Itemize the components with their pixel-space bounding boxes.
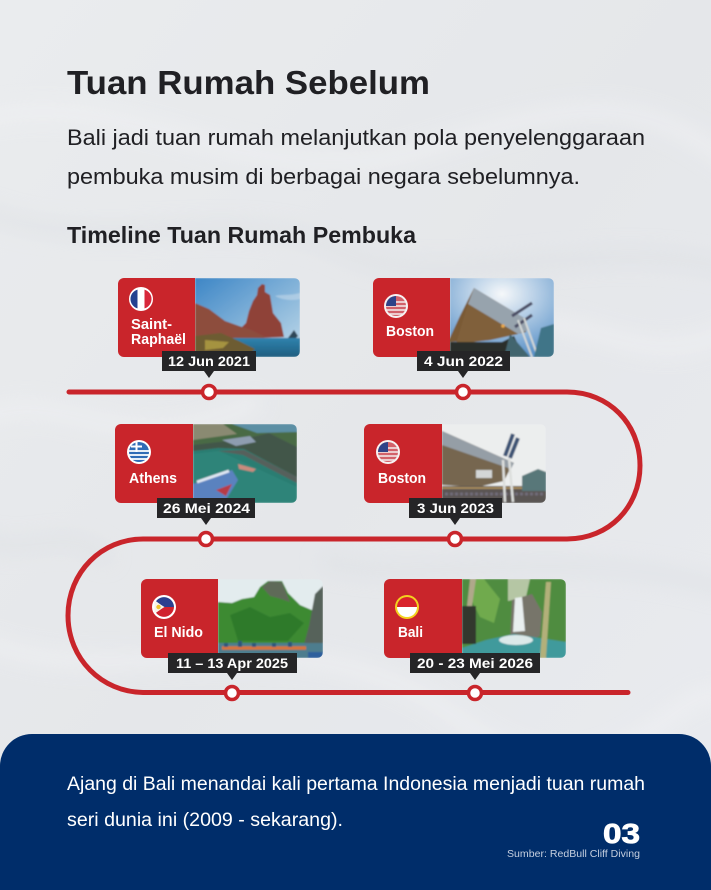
- city name: Boston: [378, 471, 426, 487]
- intro paragraph: Bali jadi tuan rumah melanjutkan pola penyelenggaraan: [67, 125, 645, 150]
- card: El Nido: [141, 579, 323, 680]
- title: Tuan Rumah Sebelum: [67, 64, 430, 101]
- photo: Bali waterfall: [462, 579, 566, 658]
- icon: Indonesia flag: [395, 595, 419, 619]
- city name: Raphaël: [131, 332, 186, 348]
- red label panel: [373, 278, 450, 357]
- date label: [417, 351, 510, 378]
- icon: Greece flag: [127, 440, 151, 464]
- photo: Athens bay: [193, 424, 297, 503]
- icon: USA flag: [376, 440, 400, 464]
- photo: Boston building 2023: [442, 424, 546, 503]
- intro paragraph: [67, 125, 645, 189]
- city name: Bali: [398, 625, 423, 641]
- card: Boston 2023: [364, 424, 546, 525]
- city name: Boston: [386, 324, 434, 340]
- city name: Athens: [129, 471, 177, 487]
- red label panel: [364, 424, 442, 503]
- card: Saint-Raphael: [118, 278, 300, 378]
- intro paragraph: pembuka musim di berbagai negara sebelumnya.: [67, 164, 580, 189]
- date label: 11 – 13 Apr 2025: [176, 655, 288, 671]
- subheading: Timeline Tuan Rumah Pembuka: [67, 222, 416, 248]
- date label: 3 Jun 2023: [417, 500, 494, 516]
- page number: 03: [603, 818, 640, 849]
- date label: [157, 498, 255, 525]
- red label panel: [118, 278, 195, 357]
- source: Sumber: RedBull Cliff Diving: [507, 849, 640, 860]
- footer panel: [0, 734, 711, 890]
- footer text: [67, 774, 645, 831]
- photo: El Nido cliffs: [218, 579, 323, 658]
- timeline nodes: [200, 386, 482, 700]
- date label: 20 - 23 Mei 2026: [417, 655, 533, 671]
- date label: [409, 498, 502, 525]
- footer text: Ajang di Bali menandai kali pertama Indonesia menjadi tuan rumah: [67, 774, 645, 795]
- date label: [410, 653, 540, 680]
- city name: El Nido: [154, 625, 203, 641]
- icon: USA flag: [384, 294, 408, 318]
- date label: [162, 351, 256, 378]
- card: Bali: [384, 579, 566, 680]
- date label: 12 Jun 2021: [168, 353, 250, 369]
- photo: Boston building: [448, 278, 554, 357]
- icon: Philippines flag: [152, 595, 176, 619]
- red label panel: [141, 579, 218, 658]
- red label panel: [115, 424, 193, 503]
- card: Boston 2022: [373, 278, 554, 378]
- date label: 4 Jun 2022: [424, 353, 503, 369]
- icon: France flag: [129, 287, 153, 311]
- date label: 26 Mei 2024: [163, 500, 250, 516]
- red label panel: [384, 579, 462, 658]
- city name: [131, 317, 186, 348]
- card: Athens: [115, 424, 297, 525]
- timeline path: [68, 392, 640, 692]
- photo: red rock coast: [195, 278, 300, 357]
- date label: [168, 653, 297, 680]
- city name: Saint-: [131, 317, 172, 333]
- footer text: seri dunia ini (2009 - sekarang).: [67, 810, 343, 831]
